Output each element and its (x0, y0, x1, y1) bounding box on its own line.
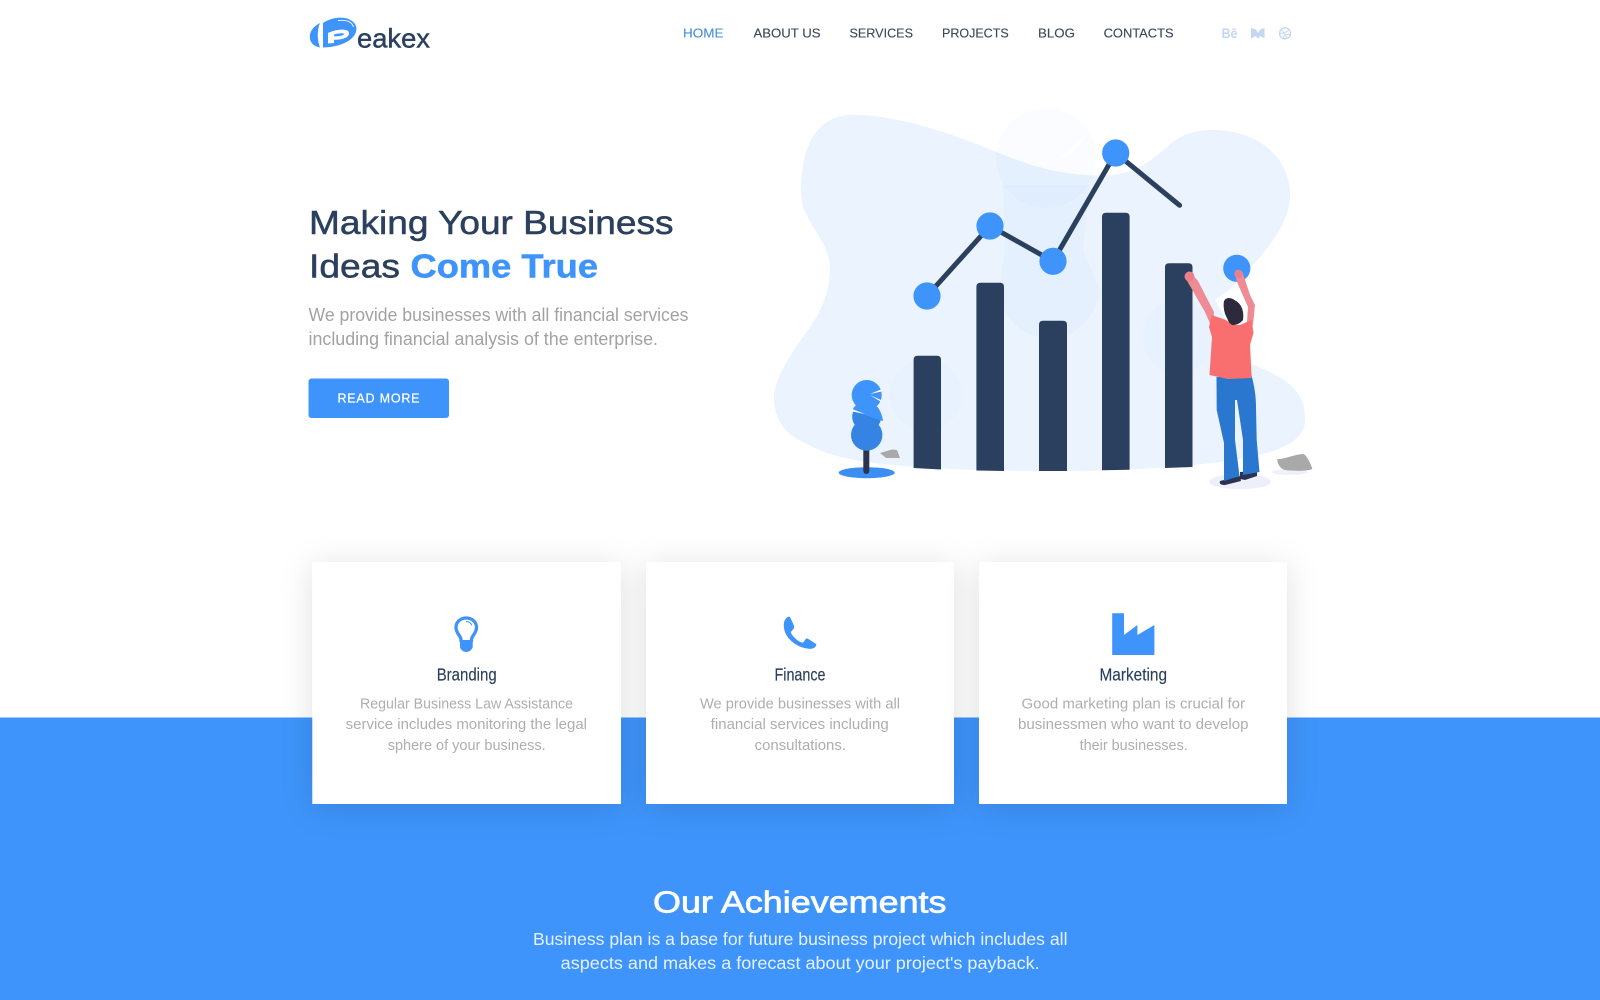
arms (1186, 272, 1255, 328)
description: Regular Business Law Assistance (360, 696, 573, 712)
navigation menu: ABOUT US (754, 26, 820, 40)
description: consultations. (755, 738, 846, 754)
blue achievements band (0, 718, 1600, 1000)
navigation menu: CONTACTS (1104, 26, 1174, 40)
read more button (308, 378, 449, 418)
description: their businesses. (1080, 738, 1188, 754)
hero heading (309, 204, 674, 284)
large rock with shadow (1272, 454, 1312, 475)
achievements text: aspects and makes a forecast about your project's payback. (561, 953, 1040, 973)
hero heading: Making Your Business (309, 204, 674, 241)
shirt (1209, 315, 1254, 379)
card: branding (312, 562, 621, 804)
head (1222, 295, 1244, 327)
line chart (927, 153, 1180, 296)
navigation menu: HOME (683, 26, 724, 40)
heading: Branding (437, 665, 497, 685)
icon: phone (784, 617, 816, 648)
description (700, 696, 900, 754)
icon: light bulb (456, 618, 476, 652)
background blob (774, 115, 1305, 471)
card: marketing (979, 562, 1287, 804)
navigation menu: SERVICES (850, 26, 913, 40)
description: financial services including (711, 717, 889, 733)
description: Good marketing plan is crucial for (1022, 696, 1245, 712)
heading: Marketing (1100, 665, 1167, 685)
hero heading: Ideas (309, 248, 400, 284)
achievements text (533, 929, 1068, 973)
description: We provide businesses with all (700, 696, 900, 712)
description: sphere of your business. (388, 738, 546, 754)
description: service includes monitoring the legal (346, 717, 587, 733)
achievements heading: Our Achievements (653, 885, 946, 920)
bars (914, 213, 1192, 471)
hero paragraph: We provide businesses with all financial services (308, 305, 688, 325)
read more button: READ MORE (338, 392, 420, 406)
card: finance (646, 562, 954, 804)
description (1018, 696, 1248, 754)
chart dots (913, 139, 1250, 310)
navigation menu: PROJECTS (942, 26, 1009, 40)
tree (839, 380, 895, 478)
hero heading: Come True (410, 248, 598, 284)
hero paragraph (308, 305, 688, 349)
shoes (1220, 471, 1257, 485)
social icons: Bē (1222, 26, 1238, 41)
faint background shapes (890, 108, 1214, 431)
navigation menu: BLOG (1038, 26, 1075, 40)
description: businessmen who want to develop (1018, 717, 1248, 733)
social icons (1222, 26, 1290, 41)
logo: eakex (357, 24, 430, 54)
logo (310, 18, 430, 54)
achievements text: Business plan is a base for future business project which includes all (533, 929, 1068, 949)
description (346, 696, 587, 754)
hero paragraph: including financial analysis of the enterprise. (308, 329, 658, 349)
trousers (1216, 376, 1260, 481)
navigation menu (683, 26, 1174, 40)
heading: Finance (774, 665, 826, 685)
hero illustration: growth chart with person (774, 108, 1312, 489)
person (1184, 270, 1271, 489)
icon: factory (1112, 613, 1154, 655)
small rock (880, 450, 900, 458)
